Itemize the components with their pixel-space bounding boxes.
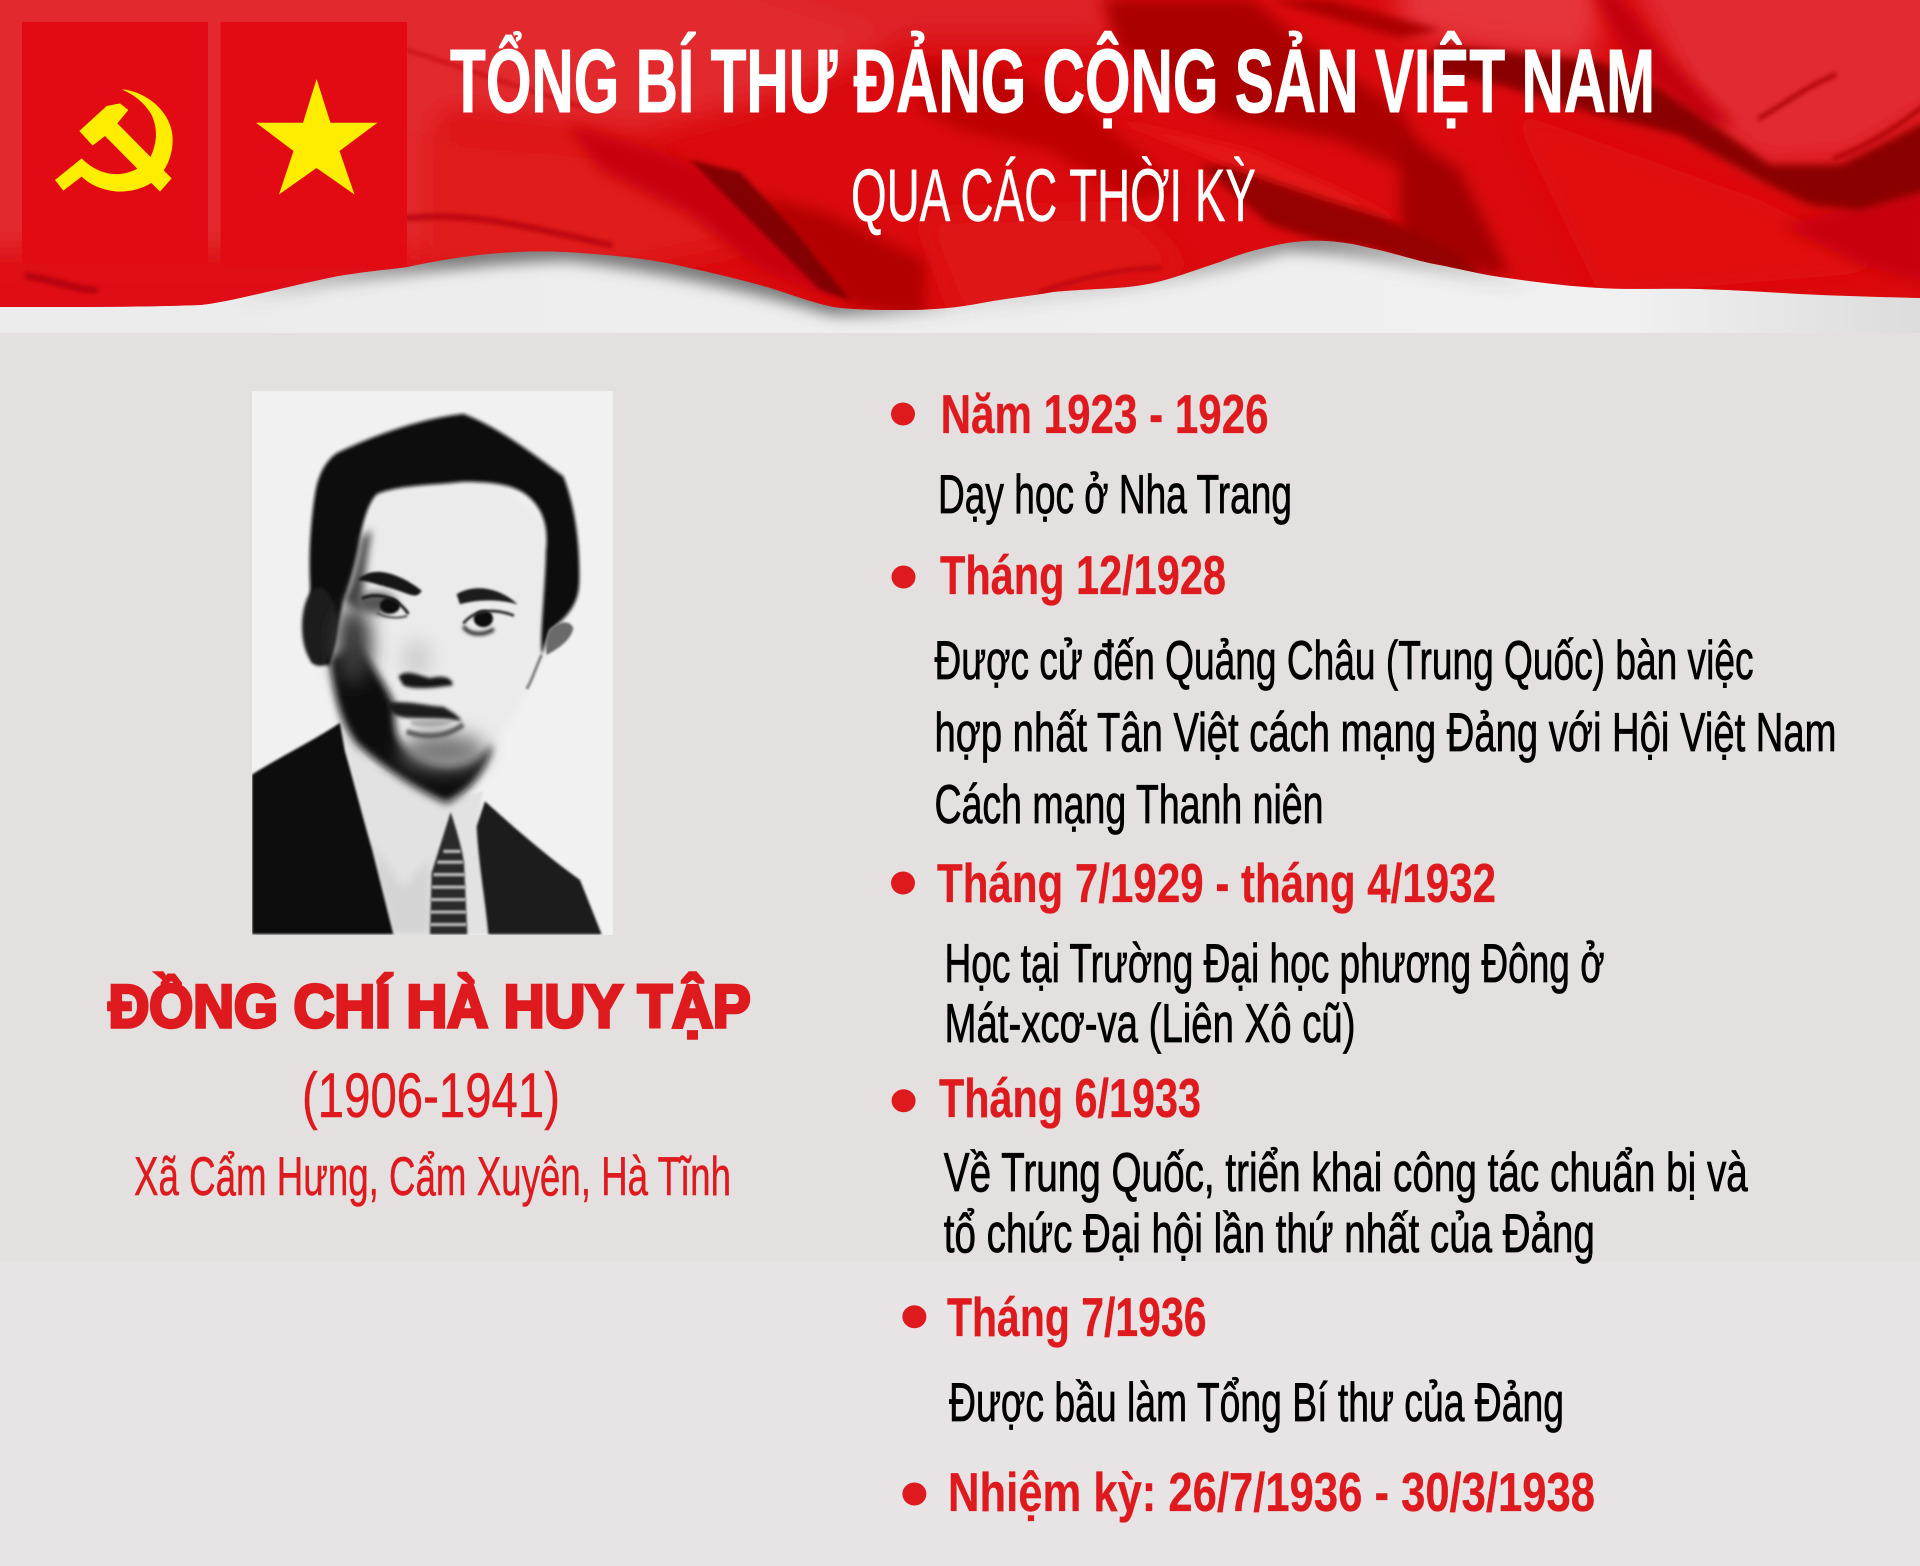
lower background band <box>0 1261 1920 1566</box>
timeline: 7/1929 - 4/1932: Mát-xcơ-va (Liên Xô cũ) <box>944 992 1356 1054</box>
timeline: 7/1929 - 4/1932 <box>891 852 1604 1054</box>
subtitle: QUA CÁC THỜI KỲ <box>851 154 1256 237</box>
timeline: 1923-1926: Dạy học ở Nha Trang <box>938 463 1292 525</box>
icon: yellow star <box>256 79 378 194</box>
portrait photo <box>252 391 613 935</box>
hair <box>310 414 579 666</box>
suit right <box>477 801 602 934</box>
name heading: ĐỒNG CHÍ HÀ HUY TẬP <box>108 973 750 1040</box>
timeline: 6/1933 <box>892 1067 1748 1264</box>
timeline: 1923-1926 <box>891 383 1292 525</box>
jaw shadow <box>330 644 493 803</box>
timeline: 12/1928: Tháng 12/1928 <box>940 544 1226 606</box>
timeline: 12/1928: Cách mạng Thanh niên <box>934 773 1324 835</box>
dark broad folds <box>567 0 1920 320</box>
Party flag panel <box>22 22 208 264</box>
header banner: waving flag <box>0 0 1920 333</box>
mouth <box>387 702 462 721</box>
eyebrows <box>358 572 422 595</box>
light areas <box>0 0 1920 330</box>
National flag panel <box>220 22 407 267</box>
timeline: 12/1928 <box>892 544 1836 835</box>
term of office: Nhiệm kỳ: 26/7/1936 - 30/3/1938 <box>948 1461 1595 1523</box>
shirt <box>342 732 488 934</box>
timeline: 7/1929 - 4/1932: Học tại Trường Đại học phương Đông ở <box>944 932 1604 994</box>
left eye <box>357 592 397 614</box>
timeline: 7/1936 <box>902 1286 1564 1433</box>
face <box>340 480 550 812</box>
timeline: 7/1929 - 4/1932: Tháng 7/1929 - tháng 4/1932 <box>937 852 1496 914</box>
timeline: 6/1933: tổ chức Đại hội lần thứ nhất của Đảng <box>944 1202 1595 1264</box>
ear right <box>546 622 573 655</box>
birthplace: Xã Cẩm Hưng, Cẩm Xuyên, Hà Tĩnh <box>134 1145 731 1207</box>
ear left <box>302 587 337 666</box>
nose <box>402 641 432 676</box>
timeline: 6/1933: Tháng 6/1933 <box>939 1067 1201 1129</box>
tie <box>430 812 467 934</box>
timeline: 7/1936: Được bầu làm Tổng Bí thư của Đảng <box>949 1371 1564 1433</box>
timeline: 7/1936: Tháng 7/1936 <box>947 1286 1206 1348</box>
right eye <box>474 610 493 627</box>
life dates: (1906-1941) <box>302 1061 560 1131</box>
icon: hammer and sickle <box>55 89 173 192</box>
suit left <box>252 723 393 934</box>
timeline: 1923-1926: Năm 1923 - 1926 <box>941 383 1269 445</box>
